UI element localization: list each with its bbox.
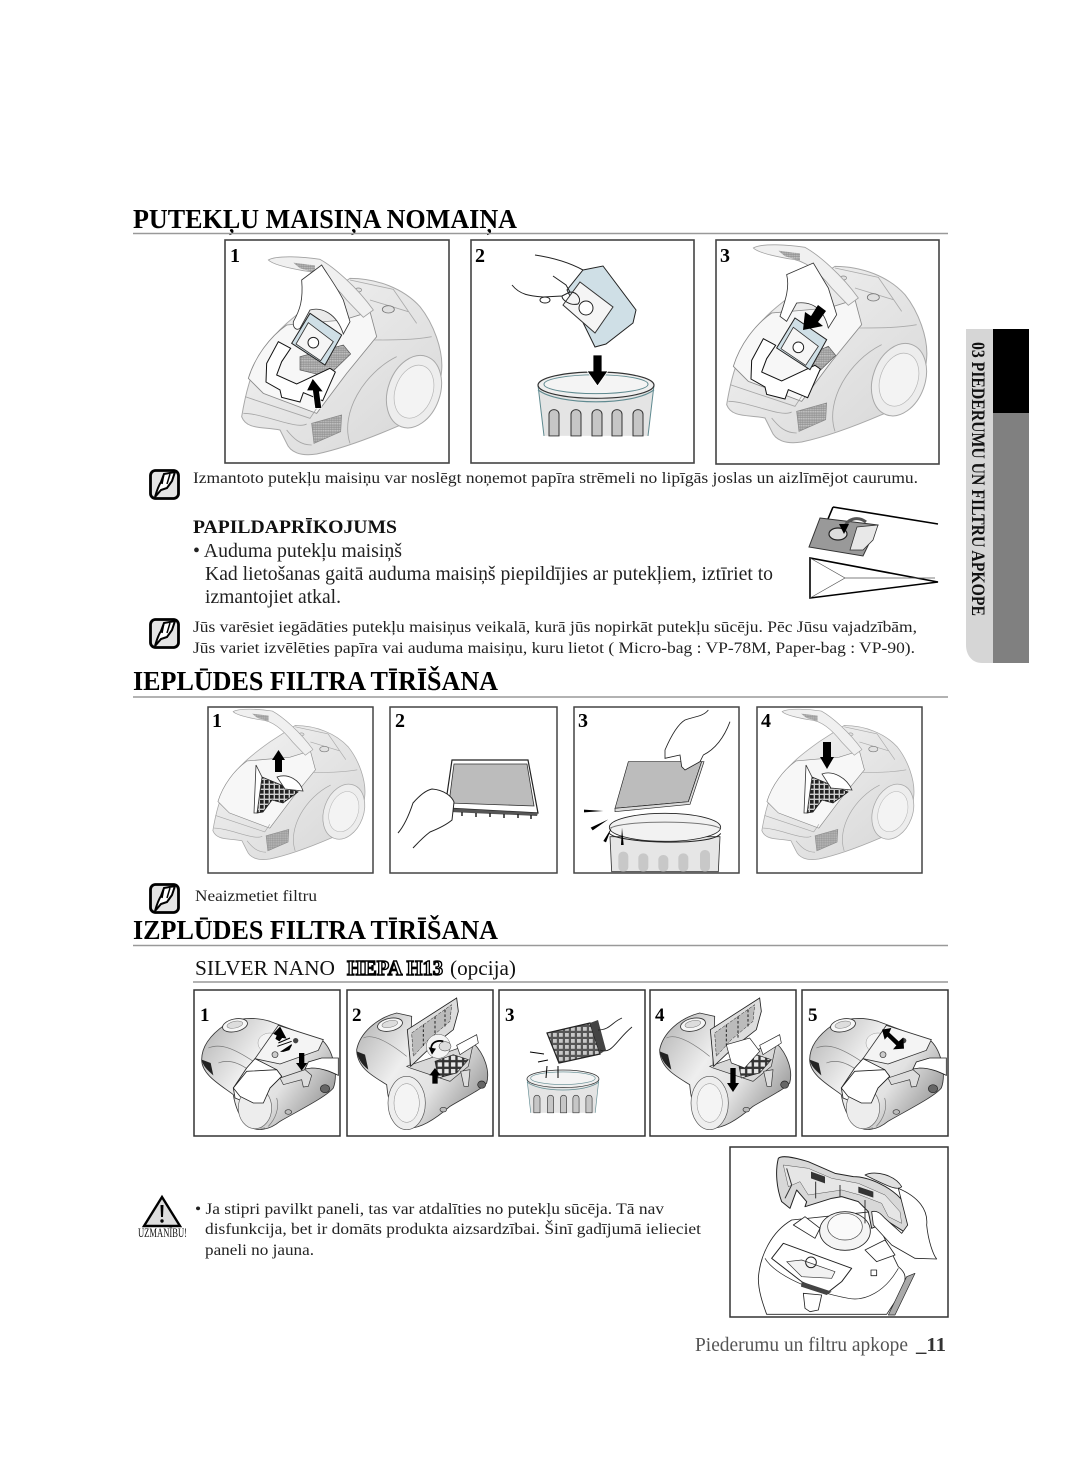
open lid (777, 1157, 908, 1232)
icon: hand (398, 789, 454, 848)
panel: step 1 remove bag (225, 240, 451, 463)
panel: intake step 3 (574, 707, 739, 873)
panel: intake step 3: 3 (578, 710, 588, 732)
note text 3: Neaizmetiet filtru (195, 888, 317, 905)
side stripe (888, 1273, 915, 1315)
subheading: Silver Nano HEPA H13: HEPA H13 (347, 956, 443, 980)
arrow: down into bin (587, 355, 608, 386)
arrow: down onto bag (803, 305, 826, 330)
icon: filter frame (445, 760, 538, 819)
central circle (820, 1212, 870, 1250)
panel: exhaust step 2 (347, 990, 493, 1136)
panel: exhaust step 5: 5 (808, 1005, 818, 1026)
note icon 2 (150, 620, 178, 648)
note text 1: Izmantoto putekļu maisiņu var noslēgt noņemot papīra strēmeli no lipīgās joslas un aizlīmējot caurumu. (193, 470, 918, 487)
note icon 3 (150, 884, 178, 912)
subheading: Silver Nano HEPA H13 (193, 956, 948, 982)
note text 2: Jūs varēsiet iegādāties putekļu maisiņus veikalā, kurā jūs nopirkāt putekļu sūcēju. Pēc Jūsu vajadzībām, (193, 619, 917, 636)
panel: intake step 1: 1 (212, 710, 222, 732)
panel: step 3 insert bag (716, 240, 939, 464)
warning text: paneli no jauna. (205, 1242, 314, 1259)
note icon 1 (150, 470, 178, 498)
text block: accessories: • Auduma putekļu maisiņš (193, 541, 402, 562)
panel: detached panel illustration (730, 1147, 948, 1317)
text block: accessories: PAPILDAPRĪKOJUMS (193, 517, 397, 538)
panel: exhaust step 4 (650, 990, 796, 1136)
page footer: Piederumu un filtru apkope (695, 1334, 908, 1356)
panel: exhaust step 3 (499, 990, 645, 1136)
panel: intake step 2: 2 (395, 710, 405, 732)
note text 2: Jūs variet izvēlēties papīra vai auduma maisiņu, kuru lietot ( Micro-bag : VP-78M, Paper-bag : VP-90). (193, 640, 915, 657)
subheading: Silver Nano HEPA H13: SILVER NANO (195, 956, 335, 980)
side tab (966, 329, 1029, 663)
panel: step 1 remove bag: 1 (230, 245, 240, 267)
icon: dust bag in hand (512, 255, 636, 347)
panel: exhaust step 1 (194, 990, 340, 1136)
text block: accessories (193, 517, 773, 608)
side tab: 03 PIEDERUMU UN FILTRU APKOPE (967, 342, 988, 616)
subheading: Silver Nano HEPA H13: (opcija) (450, 956, 516, 980)
note text 2 (193, 619, 917, 657)
bag compartment (765, 1243, 898, 1312)
panel: exhaust step 2: 2 (352, 1005, 362, 1026)
panel: step 2 throw away bag: 2 (475, 245, 485, 267)
warning icon (138, 1197, 187, 1240)
warning icon: UZMANĪBU! (138, 1225, 187, 1240)
icon: bin (527, 1070, 599, 1113)
icon: trash bin (538, 372, 654, 436)
warning text: disfunkcija, bet ir domāts produkta aizsardzībai. Šinī gadījumā ielieciet (205, 1219, 702, 1238)
panel: step 3 insert bag: 3 (720, 245, 730, 267)
heading: intake filter cleaning: IEPLŪDES FILTRA TĪRĪŠANA (133, 666, 498, 696)
vacuum body outline (758, 1212, 905, 1314)
panel: step 2 throw away bag (471, 240, 694, 463)
panel: intake step 2 (390, 707, 557, 873)
icon: HEPA filter (547, 1018, 632, 1063)
panel: intake step 1 (208, 707, 373, 873)
latches (793, 1217, 895, 1276)
panel: exhaust step 5 (802, 990, 948, 1136)
heading: dust bag replacement: PUTEKĻU MAISIŅA NOMAIŅA (133, 204, 517, 236)
text block: accessories: izmantojiet atkal. (205, 587, 341, 608)
panel: intake step 4 (757, 707, 922, 873)
panel: exhaust step 1: 1 (200, 1005, 210, 1026)
icon: cloth bag (809, 507, 938, 598)
warning text: • Ja stipri pavilkt paneli, tas var atdalīties no putekļu sūcēja. Tā nav (195, 1201, 664, 1218)
page footer: _11 (915, 1334, 946, 1356)
panel: intake step 4: 4 (761, 710, 771, 732)
warning text (195, 1201, 702, 1259)
icon: used filter, hand and bin (584, 710, 730, 872)
panel: exhaust step 4: 4 (655, 1005, 665, 1026)
text block: accessories: Kad lietošanas gaitā auduma maisiņš piepildījies ar putekļiem, iztīriet to (205, 564, 773, 585)
hand (872, 1188, 937, 1259)
heading: exhaust filter cleaning: IZPLŪDES FILTRA TĪRĪŠANA (133, 915, 498, 945)
panel: exhaust step 3: 3 (505, 1005, 514, 1026)
